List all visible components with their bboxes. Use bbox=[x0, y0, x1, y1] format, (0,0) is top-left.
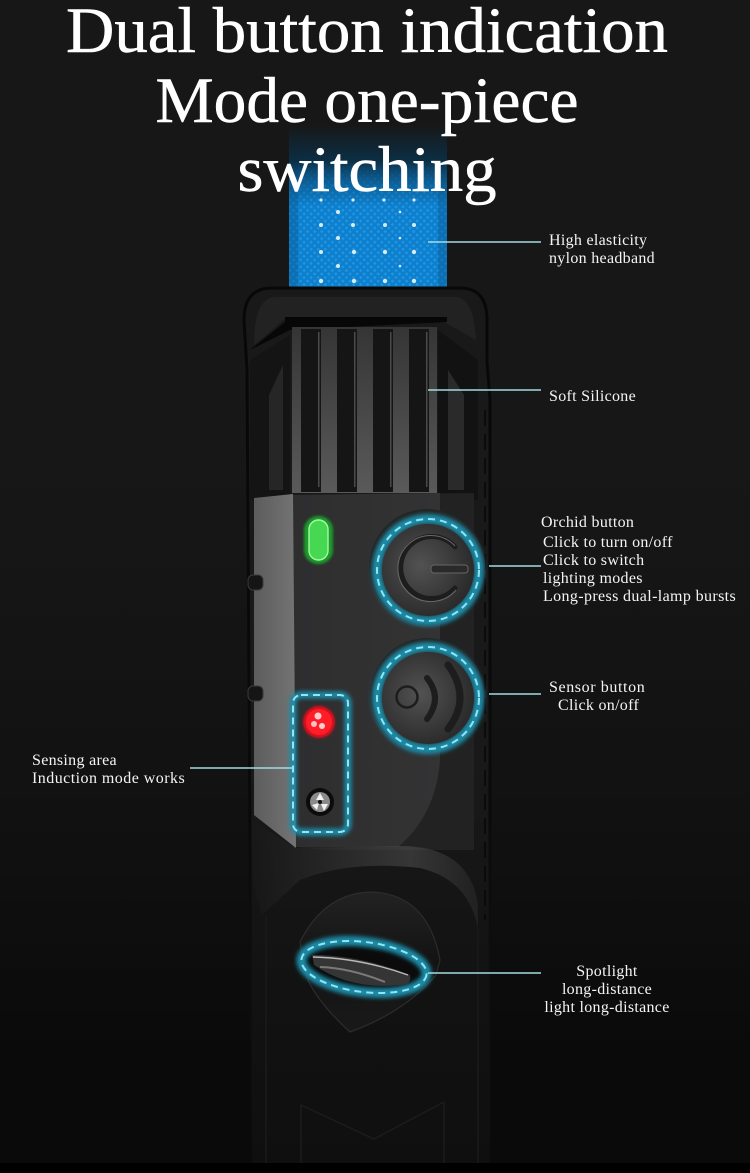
icon: sensor lens bbox=[306, 788, 334, 816]
callout: sensing area: Induction mode works bbox=[32, 770, 185, 787]
headlamp body bbox=[244, 288, 490, 1163]
callout: spotlight: long-distance bbox=[562, 981, 652, 998]
callout: headband: nylon headband bbox=[549, 250, 655, 267]
sensing area highlight bbox=[293, 695, 348, 832]
callout: orchid button: Click to turn on/off bbox=[543, 534, 673, 551]
control panel bbox=[248, 493, 478, 930]
callout: sensor button: Sensor button bbox=[549, 679, 645, 696]
bottom band bbox=[0, 1163, 750, 1173]
callout: sensor button bbox=[489, 679, 645, 714]
callout: orchid button: Orchid button bbox=[541, 514, 634, 531]
icon: sensor button bbox=[370, 638, 484, 752]
icon: red LED bbox=[303, 706, 335, 738]
title: switching bbox=[238, 134, 496, 206]
callout: headband bbox=[428, 232, 655, 267]
title bbox=[66, 0, 668, 206]
callout: sensing area bbox=[32, 752, 293, 787]
callout: orchid button: lighting modes bbox=[543, 570, 643, 587]
callout: headband: High elasticity bbox=[549, 232, 647, 249]
lower body chevron bbox=[266, 915, 478, 1163]
callout: orchid button: Long-press dual-lamp bursts bbox=[543, 588, 736, 605]
icon: green status LED bbox=[304, 516, 333, 564]
spotlight housing bbox=[300, 892, 440, 1032]
callout: sensing area: Sensing area bbox=[32, 752, 117, 769]
callout: orchid button: Click to switch bbox=[543, 552, 644, 569]
nylon headband strap bbox=[289, 125, 447, 288]
callout: spotlight bbox=[428, 963, 670, 1016]
callout: orchid button bbox=[489, 514, 736, 605]
callout: sensor button: Click on/off bbox=[558, 697, 639, 714]
title: Mode one-piece bbox=[156, 65, 578, 137]
callout: silicone: Soft Silicone bbox=[549, 388, 636, 405]
callout: spotlight: light long-distance bbox=[544, 999, 670, 1016]
callout: spotlight: Spotlight bbox=[576, 963, 638, 980]
spotlight highlight bbox=[298, 935, 430, 999]
silicone ribs bbox=[292, 327, 437, 493]
icon: power button bbox=[369, 509, 485, 625]
